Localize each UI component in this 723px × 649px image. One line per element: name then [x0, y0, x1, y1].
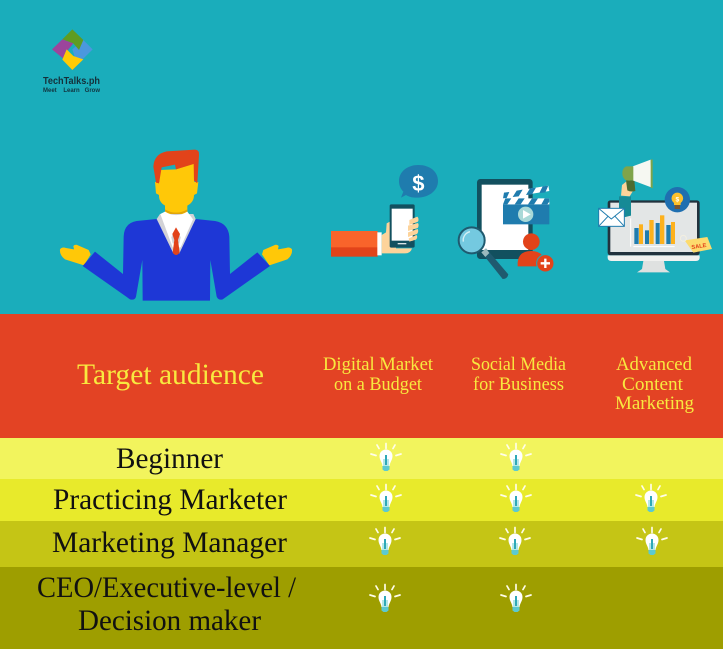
shirt collar	[160, 212, 193, 247]
column heading: Advanced Content Marketing: Content	[622, 374, 684, 395]
icon: monitor with chart, megaphone, bulb badge, envelope and sale tag	[599, 159, 712, 272]
icon: bulb	[501, 484, 531, 512]
envelope	[599, 208, 624, 226]
icon: hand holding phone with dollar bubble	[331, 165, 438, 257]
hand	[382, 218, 412, 253]
icon: bulb	[501, 584, 531, 612]
column heading: Digital Market on a Budget	[323, 354, 434, 395]
icon: bulb	[371, 484, 401, 512]
logo: TechTalks.ph	[43, 29, 100, 94]
suit	[83, 219, 270, 301]
panel: teal header background	[0, 0, 723, 314]
column heading: Social Media for Business: Social Media	[471, 354, 567, 375]
logo: TechTalks.ph: TechTalks.ph	[43, 75, 100, 87]
row: Practicing Marketer	[0, 479, 723, 521]
icon: bulb	[501, 444, 531, 471]
icon: hand holding phone with dollar bubble: $	[412, 171, 424, 196]
icon: bulb	[370, 584, 400, 612]
left hand	[60, 245, 91, 265]
column heading: Social Media for Business: for Business	[473, 374, 564, 395]
row: Marketing Manager	[0, 521, 723, 567]
icon: monitor with chart, megaphone, bulb badge, envelope and sale tag: $	[675, 197, 679, 204]
arm and cuff	[619, 196, 631, 217]
neck	[165, 203, 187, 227]
panel: red header row	[0, 314, 723, 438]
icon: bulb	[636, 484, 666, 512]
tablet	[477, 179, 533, 259]
column heading: Digital Market on a Budget: Digital Market	[323, 354, 434, 375]
tie	[172, 227, 180, 255]
icon: bulb	[637, 528, 667, 555]
sale tag	[685, 237, 712, 253]
sleeve	[331, 231, 378, 248]
column heading: Advanced Content Marketing	[615, 354, 694, 414]
column heading: Advanced Content Marketing: Marketing	[615, 393, 694, 414]
row: Beginner	[0, 438, 723, 479]
row: CEO/Executive-level / Decision maker: Decision maker	[78, 604, 261, 637]
heading: Target audience: Target audience	[77, 358, 264, 391]
right hand	[262, 245, 292, 265]
icon: tablet with video, magnifier and user	[459, 179, 554, 279]
speech bubble	[399, 165, 438, 198]
column heading: Social Media for Business	[471, 354, 567, 395]
icon: bulb	[371, 444, 401, 471]
row: Marketing Manager: Marketing Manager	[52, 526, 287, 559]
user with plus	[523, 233, 540, 250]
fingers	[408, 217, 419, 242]
clapperboard	[503, 204, 549, 224]
row: CEO/Executive-level / Decision maker: CEO/Executive-level /	[37, 571, 297, 604]
face	[155, 163, 198, 208]
row: CEO/Executive-level / Decision maker	[0, 567, 723, 649]
logo: TechTalks.ph: Meet Learn Grow	[43, 88, 100, 94]
row: Beginner: Beginner	[116, 442, 223, 475]
icon: bulb	[500, 528, 530, 555]
row: Practicing Marketer: Practicing Marketer	[53, 483, 287, 516]
bulb badge	[665, 187, 690, 212]
icon: bulb	[370, 528, 400, 555]
magnifier	[481, 248, 508, 279]
hair	[153, 150, 199, 183]
monitor	[608, 200, 700, 255]
collar shadow	[157, 214, 196, 253]
illustration: businessman shrugging	[60, 150, 292, 301]
column heading: Advanced Content Marketing: Advanced	[616, 354, 692, 375]
icon: monitor with chart, megaphone, bulb badge, envelope and sale tag: SALE	[691, 243, 707, 251]
column heading: Digital Market on a Budget: on a Budget	[334, 374, 423, 395]
play button	[518, 207, 533, 222]
phone	[390, 204, 415, 248]
bar chart	[631, 215, 675, 247]
megaphone	[626, 180, 635, 192]
